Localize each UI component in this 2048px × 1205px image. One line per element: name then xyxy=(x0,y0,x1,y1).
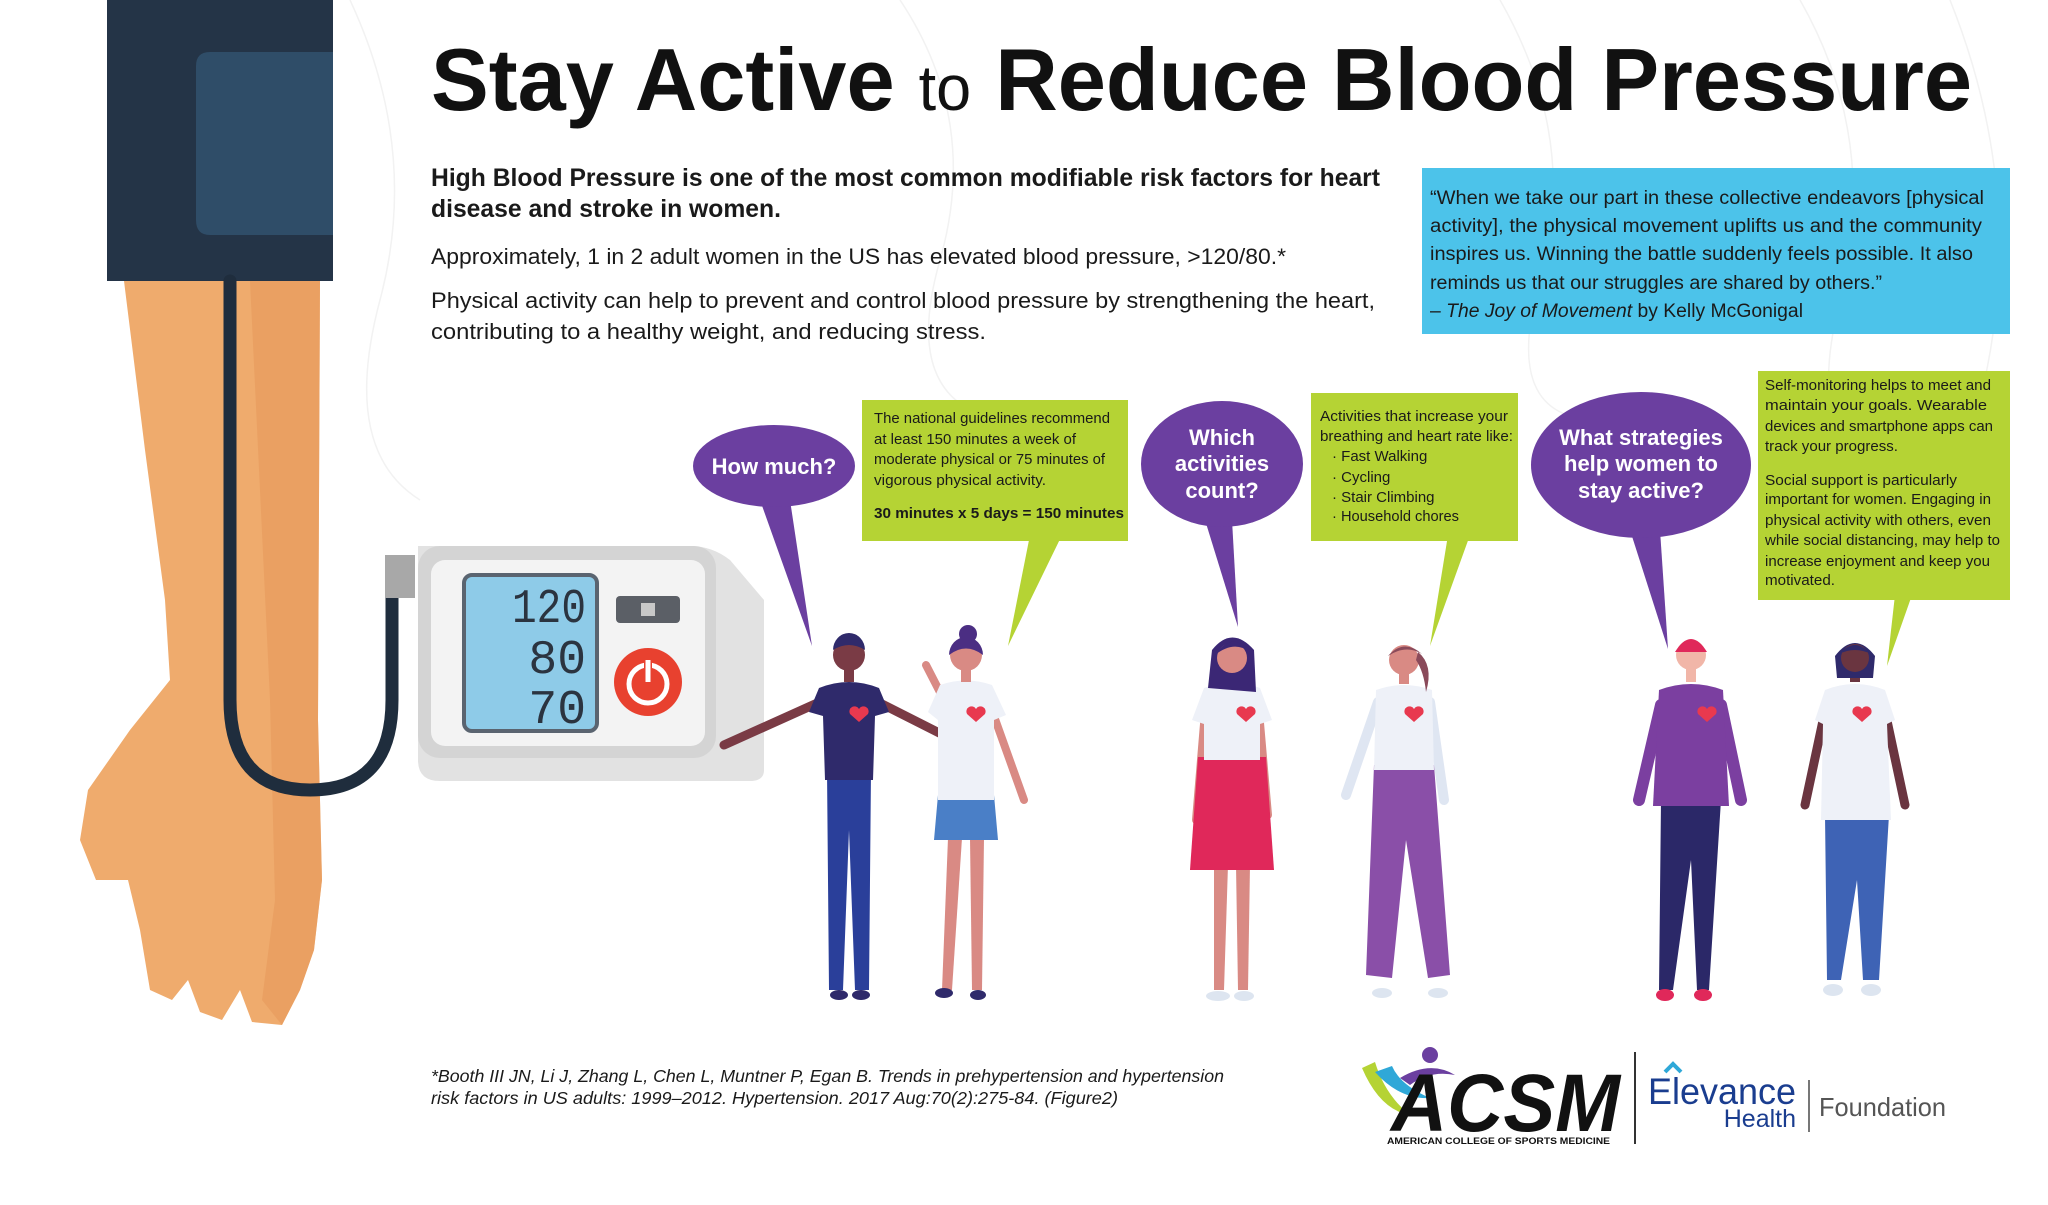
bubble: What strategies help women to stay active?: What strategies xyxy=(1559,425,1723,450)
green box: self-monitoring and social support xyxy=(1758,371,2010,666)
green box: activities list: breathing and heart rate like: xyxy=(1320,428,1513,445)
green box: self-monitoring and social support: motivated. xyxy=(1765,573,1835,589)
ACSM logo: AMERICAN COLLEGE OF SPORTS MEDICINE xyxy=(1387,1136,1610,1147)
Elevance Health Foundation logo: Foundation xyxy=(1819,1092,1946,1122)
quote box: activity], the physical movement uplifts us and the community xyxy=(1430,216,1983,237)
Elevance Health Foundation logo: Elevance xyxy=(1648,1071,1796,1112)
Elevance Health Foundation logo: Health xyxy=(1724,1105,1796,1133)
bubble: Which activities count? xyxy=(1141,401,1303,627)
quote box: inspires us. Winning the battle suddenly feels possible. It also xyxy=(1430,244,1973,265)
bubble: What strategies help women to stay active? xyxy=(1531,392,1751,649)
green box: activities list: · Fast Walking xyxy=(1332,448,1427,465)
green box: guidelines xyxy=(862,400,1128,646)
person 3: white shirt, red skirt xyxy=(1190,638,1274,1001)
intro text block: Approximately, 1 in 2 adult women in the US has elevated blood pressure, >120/80.* xyxy=(431,244,1286,269)
green box: self-monitoring and social support: physical activity with others, even xyxy=(1765,513,1991,529)
icon: power button xyxy=(614,648,682,716)
bubble: What strategies help women to stay active?: stay active? xyxy=(1578,478,1704,503)
tube connecting cuff to monitor xyxy=(230,281,392,790)
ACSM logo: ACSM xyxy=(1389,1058,1622,1149)
intro text block: High Blood Pressure is one of the most common modifiable risk factors for heart xyxy=(431,164,1381,192)
green box: activities list: · Cycling xyxy=(1332,469,1390,486)
person 4: white long sleeve, purple wide pants xyxy=(1346,645,1450,998)
quote box: – The Joy of Movement by Kelly McGonigal xyxy=(1430,301,1803,322)
green box: self-monitoring and social support: increase enjoyment and keep you xyxy=(1765,554,1990,570)
bubble: Which activities count?: count? xyxy=(1185,478,1259,503)
green box: activities list xyxy=(1311,393,1518,646)
intro text block: disease and stroke in women. xyxy=(431,195,781,223)
icon: ACSM figure swoosh xyxy=(1362,1047,1455,1115)
quote box: “When we take our part in these collective endeavors [physical xyxy=(1430,188,1984,209)
green box: self-monitoring and social support: important for women. Engaging in xyxy=(1765,492,1991,508)
green box: guidelines: at least 150 minutes a week of xyxy=(874,431,1077,448)
intro text block: contributing to a healthy weight, and reducing stress. xyxy=(431,319,986,344)
person 2: white shirt, blue skirt xyxy=(926,625,1024,1000)
quote box xyxy=(1422,168,2010,334)
intro text block: Physical activity can help to prevent and control blood pressure by strengthening the heart, xyxy=(431,288,1375,313)
bubble: How much?: How much? xyxy=(712,454,836,479)
green box: self-monitoring and social support: Social support is particularly xyxy=(1765,473,1958,489)
footnote citation: *Booth III JN, Li J, Zhang L, Chen L, Muntner P, Egan B. Trends in prehypertension and hypertension xyxy=(431,1066,1224,1086)
LCD display xyxy=(464,575,597,738)
person 1: navy shirt, arms out xyxy=(724,633,969,1000)
green box: activities list: · Stair Climbing xyxy=(1332,489,1435,506)
footnote citation xyxy=(431,1066,1224,1108)
title: Stay Active to Reduce Blood Pressure xyxy=(431,30,1972,129)
bubble: What strategies help women to stay active?: help women to xyxy=(1564,451,1718,476)
bubble: Which activities count?: Which xyxy=(1189,425,1255,450)
bubble: How much? xyxy=(693,425,855,646)
Elevance Health Foundation logo xyxy=(1648,1064,1946,1133)
green box: guidelines: moderate physical or 75 minutes of xyxy=(874,451,1106,468)
LCD display: 80 xyxy=(528,634,586,688)
footnote citation: risk factors in US adults: 1999–2012. Hypertension. 2017 Aug:70(2):275-84. (Figure2) xyxy=(431,1088,1118,1108)
LCD display: 70 xyxy=(528,684,586,738)
green box: activities list: Activities that increase your xyxy=(1320,408,1508,425)
green box: guidelines: The national guidelines recommend xyxy=(874,410,1110,427)
blood pressure cuff xyxy=(107,0,333,281)
quote box: reminds us that our struggles are shared by others.” xyxy=(1430,273,1882,294)
green box: self-monitoring and social support: Self-monitoring helps to meet and xyxy=(1765,378,1991,394)
person 6: white shirt, blue jeans xyxy=(1805,643,1905,996)
green box: activities list: · Household chores xyxy=(1332,508,1459,525)
green box: self-monitoring and social support: devices and smartphone apps can xyxy=(1765,419,1993,435)
bubble: Which activities count?: activities xyxy=(1175,451,1269,476)
small button xyxy=(616,596,680,623)
intro text block xyxy=(431,164,1381,344)
arm and hand xyxy=(80,281,322,1025)
person 5: purple sweater, navy pants xyxy=(1639,639,1741,1001)
green box: guidelines: vigorous physical activity. xyxy=(874,472,1046,489)
green box: self-monitoring and social support: while social distancing, may help to xyxy=(1764,533,2000,549)
green box: self-monitoring and social support: track your progress. xyxy=(1765,439,1898,455)
green box: self-monitoring and social support: maintain your goals. Wearable xyxy=(1765,398,1987,414)
blood pressure monitor xyxy=(385,546,764,781)
green box: guidelines: 30 minutes x 5 days = 150 minutes xyxy=(874,505,1124,522)
LCD display: 120 xyxy=(512,583,586,637)
